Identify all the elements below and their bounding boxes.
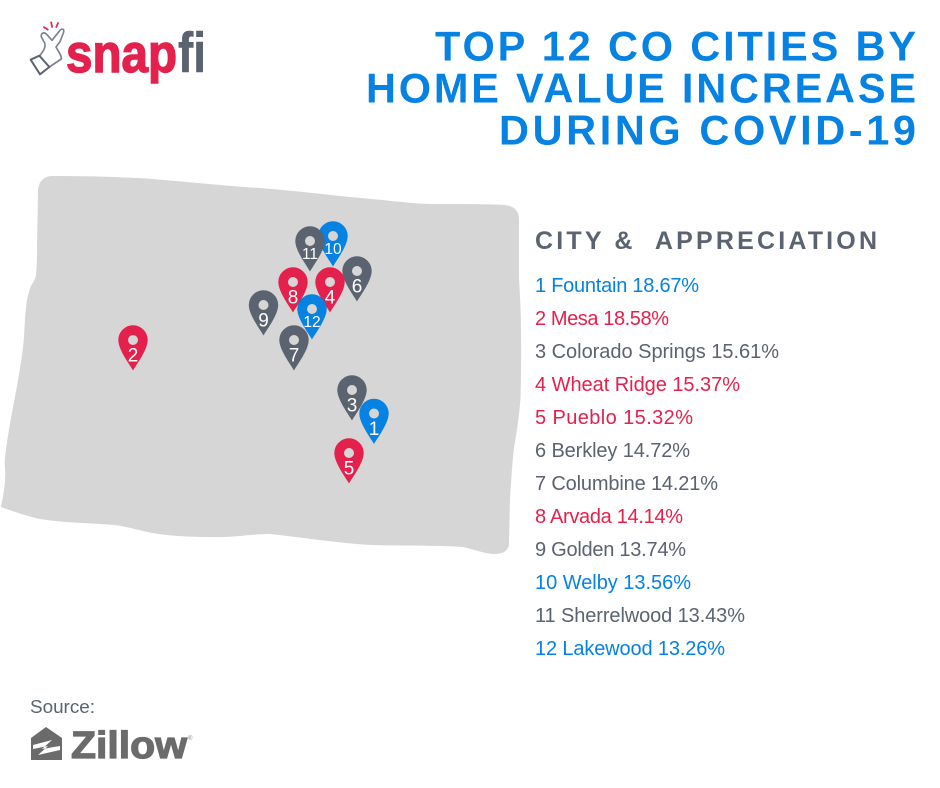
logo: Zillow xyxy=(31,725,193,767)
pin 10: Welby xyxy=(318,221,348,266)
logo: snapfi xyxy=(31,21,206,85)
pin 3: Colorado Springs xyxy=(337,375,367,420)
registered mark: ® xyxy=(188,735,193,742)
icon: Zillow house xyxy=(31,727,62,760)
legend list: cities and appreciation: 7 Columbine 14.21% xyxy=(535,473,718,495)
pin 5: Pueblo xyxy=(334,438,364,484)
legend list: cities and appreciation: 8 Arvada 14.14% xyxy=(535,506,683,528)
legend list: cities and appreciation: 12 Lakewood 13.26% xyxy=(535,638,725,660)
pin 4: Wheat Ridge xyxy=(315,267,345,312)
logo wordmark: fi: fi xyxy=(178,21,206,85)
legend list: cities and appreciation: 6 Berkley 14.72% xyxy=(535,440,690,462)
pin 11: Sherrelwood: 11 xyxy=(302,246,318,263)
pin 1: Fountain xyxy=(359,399,389,444)
pin markers xyxy=(118,221,389,484)
pin 7: Columbine xyxy=(279,325,309,370)
title: TOP 12 CO CITIES BY xyxy=(435,22,916,70)
legend list: cities and appreciation xyxy=(535,275,779,660)
legend heading: CITY & APPRECIATION xyxy=(535,227,877,255)
pin 12: Lakewood: 12 xyxy=(303,314,321,331)
pin 3: Colorado Springs: 3 xyxy=(347,396,357,416)
legend list: cities and appreciation: 2 Mesa 18.58% xyxy=(535,308,669,330)
pin 9: Golden: 9 xyxy=(258,310,269,332)
pin 7: Columbine: 7 xyxy=(289,346,299,366)
legend list: cities and appreciation: 3 Colorado Springs 15.61% xyxy=(535,341,779,363)
legend list: cities and appreciation: 5 Pueblo 15.32% xyxy=(535,407,693,429)
pin 12: Lakewood xyxy=(297,294,327,340)
legend list: cities and appreciation: 11 Sherrelwood 13.43% xyxy=(535,605,745,627)
pin 2: Mesa xyxy=(118,325,148,370)
pin 5: Pueblo: 5 xyxy=(344,458,354,480)
legend list: cities and appreciation: 9 Golden 13.74% xyxy=(535,539,686,561)
icon: snapping hand xyxy=(31,22,64,74)
title xyxy=(366,22,916,154)
pin 6: Berkley xyxy=(342,256,372,302)
logo wordmark: snap: snap xyxy=(66,24,177,84)
pin 8: Arvada xyxy=(278,267,308,312)
title: HOME VALUE INCREASE xyxy=(366,64,916,112)
pin 1: Fountain: 1 xyxy=(369,419,379,440)
pin 2: Mesa: 2 xyxy=(128,346,138,366)
legend list: cities and appreciation: 10 Welby 13.56% xyxy=(535,572,691,594)
source label: Source: xyxy=(30,696,95,717)
pin 9: Golden xyxy=(249,290,278,336)
wordmark: Zillow: Zillow xyxy=(71,725,187,767)
title: DURING COVID-19 xyxy=(499,106,916,154)
map: Colorado silhouette xyxy=(1,176,521,554)
pin 10: Welby: 10 xyxy=(324,241,342,258)
pin 6: Berkley: 6 xyxy=(352,276,362,298)
pin 11: Sherrelwood xyxy=(295,226,325,272)
legend list: cities and appreciation: 4 Wheat Ridge 15.37% xyxy=(535,374,740,396)
legend list: cities and appreciation: 1 Fountain 18.67% xyxy=(535,275,699,297)
pin 4: Wheat Ridge: 4 xyxy=(325,288,336,308)
pin 8: Arvada: 8 xyxy=(288,288,298,308)
